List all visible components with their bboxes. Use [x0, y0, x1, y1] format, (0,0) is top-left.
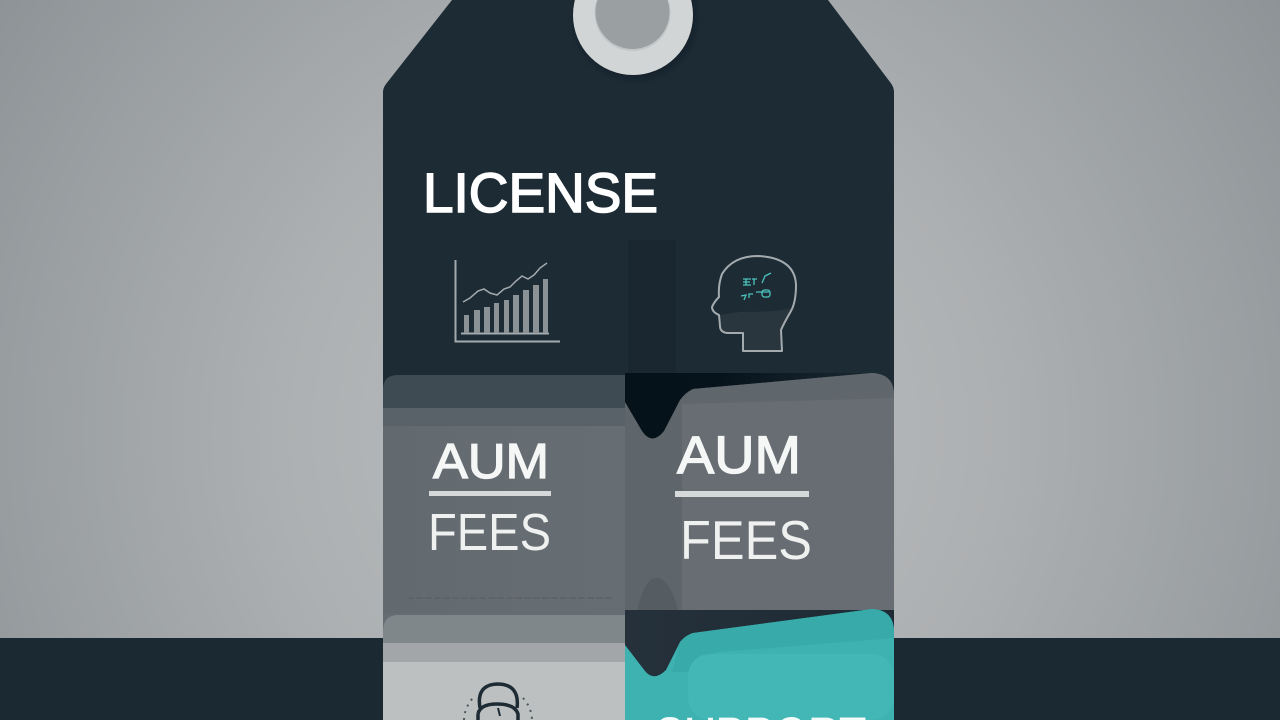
ring: [573, 0, 693, 75]
teal lip: [680, 609, 894, 643]
folder face: [625, 373, 894, 613]
left label: AUM over FEES: [429, 443, 551, 550]
folder lip: [692, 373, 894, 394]
text: FEES: FEES: [428, 504, 551, 562]
centre fold shadow: [628, 240, 676, 380]
text: AUM: AUM: [677, 426, 801, 485]
ring shadow: [575, 0, 695, 78]
eyelet ring: [573, 0, 695, 78]
teal folder: [625, 609, 894, 720]
dark notch backing: [625, 610, 894, 613]
icon detail: teal idea marks: [741, 273, 771, 300]
text: AUM: AUM: [433, 435, 549, 489]
divider: [429, 491, 551, 496]
fold hump: [637, 578, 678, 610]
dark notch backing: [625, 373, 840, 438]
icon: support person with cap: [464, 684, 532, 720]
panel: lower right support tab: [625, 609, 894, 720]
text: FEES: FEES: [680, 509, 812, 571]
panel: left AUM fees: [383, 375, 625, 616]
hole: [596, 0, 670, 49]
panel: lower left tab: [383, 613, 625, 720]
divider: [675, 491, 809, 497]
tag body: [383, 0, 894, 390]
right label: AUM over FEES: [675, 436, 810, 560]
panel: right AUM fees: [625, 373, 894, 613]
dark floor band: [0, 638, 1280, 720]
heading: LICENSE: LICENSE: [423, 161, 658, 224]
price tag: [383, 0, 894, 720]
icon: growth bar chart: [456, 260, 560, 342]
icon: head with ideas: [712, 256, 796, 351]
